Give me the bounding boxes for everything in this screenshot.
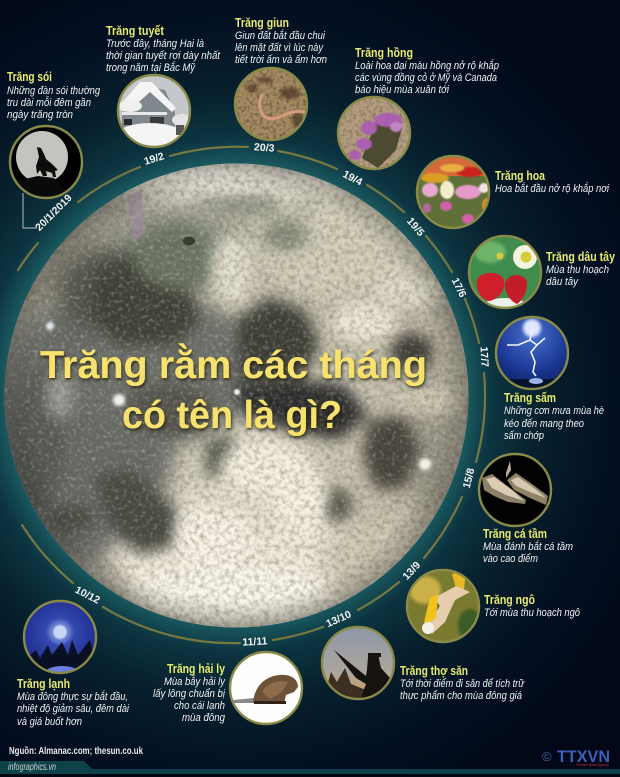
footer band: infographics.vn bbox=[8, 762, 56, 773]
text bbox=[17, 676, 129, 728]
connector: wolf moon to first date bbox=[23, 193, 37, 228]
text: Trăng sói bbox=[7, 69, 52, 84]
panel: Trăng sấm bbox=[496, 317, 604, 442]
text: Mùa đông thực sự bắt đầu, bbox=[17, 690, 128, 703]
text bbox=[484, 592, 580, 619]
text: Trăng thợ săn bbox=[400, 663, 468, 678]
panel: Trăng dâu tây bbox=[469, 236, 616, 310]
panel: Trăng thợ săn bbox=[322, 627, 525, 702]
orbit arc bbox=[18, 147, 485, 643]
text: trong năm tại Bắc Mỹ bbox=[106, 61, 196, 74]
text: tiết trời ấm và ẩm hơn bbox=[235, 54, 327, 66]
date labels: 13/10 bbox=[324, 608, 353, 630]
text: tru dài mỗi đêm gần bbox=[7, 96, 91, 109]
text: thời gian tuyết rơi dày nhất bbox=[106, 50, 221, 62]
text: mùa đông bbox=[182, 712, 226, 724]
full moon photo bbox=[0, 160, 480, 630]
text bbox=[495, 168, 609, 195]
logo: TTXVN: TTXVN bbox=[557, 747, 610, 766]
icon: earthworm in soil bbox=[235, 68, 307, 140]
date labels: 17/7 bbox=[477, 346, 491, 368]
icon: lightning bbox=[496, 317, 568, 389]
panel: Trăng hải ly bbox=[153, 652, 302, 724]
text: lên mặt đất vì lúc này bbox=[235, 42, 324, 54]
logo: TTXVN: © bbox=[542, 749, 552, 764]
date labels: 20/1/2019 bbox=[33, 192, 75, 234]
text: Loài hoa dại màu hồng nở rộ khắp bbox=[355, 59, 499, 72]
text bbox=[153, 661, 226, 724]
text bbox=[546, 249, 616, 288]
text: Mùa đánh bắt cá tầm bbox=[483, 540, 573, 553]
text: Trăng tuyết bbox=[106, 23, 165, 38]
icon: strawberries bbox=[469, 236, 541, 310]
text bbox=[504, 390, 604, 442]
text: Trăng giun bbox=[235, 15, 289, 30]
text: Trăng hồng bbox=[355, 45, 413, 60]
text: thực phẩm cho mùa đông giá bbox=[400, 690, 522, 702]
icon: sturgeon bbox=[479, 454, 551, 526]
text: báo hiệu mùa xuân tới bbox=[355, 84, 449, 96]
date labels: 17/6 bbox=[449, 276, 469, 300]
text bbox=[355, 45, 499, 96]
footer band bbox=[0, 761, 620, 777]
text: Trăng lạnh bbox=[17, 676, 70, 691]
text bbox=[483, 526, 573, 565]
panel: Trăng hồng bbox=[338, 45, 499, 169]
text: Trăng hải ly bbox=[167, 661, 226, 676]
date labels: 15/8 bbox=[461, 467, 477, 490]
text bbox=[400, 663, 525, 702]
text: nhiệt độ giảm sâu, đêm dài bbox=[17, 703, 129, 715]
date labels: 20/3 bbox=[254, 141, 275, 155]
icon: wolf howling at the moon bbox=[11, 127, 81, 197]
crater texture bbox=[0, 160, 480, 630]
text bbox=[7, 69, 101, 121]
purple seam bbox=[128, 190, 146, 242]
icon: beaver bbox=[230, 652, 302, 724]
logo: TTXVN: Vietnam News Agency bbox=[576, 762, 610, 767]
icon: snowy house bbox=[119, 76, 189, 146]
panel: Trăng ngô bbox=[407, 570, 580, 642]
text: Trăng cá tầm bbox=[483, 526, 547, 541]
icon: corn bbox=[407, 570, 482, 642]
text: các vùng đồng cỏ ở Mỹ và Canada bbox=[355, 72, 497, 84]
text: cho cái lạnh bbox=[174, 700, 225, 712]
text: Tới mùa thu hoạch ngô bbox=[484, 607, 580, 619]
text: Trăng hoa bbox=[495, 168, 546, 183]
panel: Trăng lạnh bbox=[17, 601, 129, 728]
icon: cold night bbox=[25, 602, 95, 672]
panel: Trăng sói bbox=[7, 69, 101, 200]
bright craters bbox=[46, 236, 431, 470]
text: Mùa thu hoạch bbox=[546, 264, 609, 276]
icon: hunter silhouette bbox=[322, 627, 394, 700]
panel: Trăng hoa bbox=[417, 156, 609, 228]
text: Những đàn sói thường bbox=[7, 85, 101, 97]
panel: Trăng tuyết bbox=[106, 23, 221, 149]
date labels: 19/5 bbox=[404, 215, 427, 239]
date labels: 19/4 bbox=[341, 168, 364, 189]
text: sấm chớp bbox=[504, 430, 544, 442]
text: kéo đến mang theo bbox=[504, 418, 584, 430]
date labels: 10/12 bbox=[73, 584, 102, 607]
title: Trăng rằm các tháng bbox=[40, 343, 427, 387]
text: ngày trăng tròn bbox=[7, 109, 73, 121]
date labels: 13/9 bbox=[400, 559, 423, 583]
text bbox=[235, 15, 327, 66]
text: Trăng ngô bbox=[484, 592, 535, 607]
text: vào cao điểm bbox=[483, 553, 538, 565]
text: dâu tây bbox=[546, 276, 579, 288]
text: Tới thời điểm đi săn để tích trữ bbox=[400, 678, 525, 690]
text: Mùa bẫy hải ly bbox=[164, 675, 226, 688]
icon: flower field bbox=[417, 156, 492, 228]
text: Trước đây, tháng Hai là bbox=[106, 38, 204, 50]
date labels: 11/11 bbox=[242, 635, 268, 649]
text: lấy lông chuẩn bị bbox=[153, 688, 225, 700]
panel: Trăng cá tầm bbox=[479, 454, 573, 565]
title: có tên là gì? bbox=[122, 394, 342, 437]
text: Trăng sấm bbox=[504, 390, 556, 405]
date labels: 19/2 bbox=[143, 150, 166, 168]
date labels bbox=[33, 141, 491, 649]
icon: pink wildflowers bbox=[338, 97, 410, 169]
title bbox=[40, 343, 427, 437]
text bbox=[106, 23, 221, 74]
text: Giun đất bắt đầu chui bbox=[235, 29, 325, 42]
source note: Nguồn: Almanac.com; thesun.co.uk bbox=[9, 745, 143, 757]
text: và giá buốt hơn bbox=[17, 716, 82, 728]
panel: Trăng giun bbox=[235, 15, 327, 140]
